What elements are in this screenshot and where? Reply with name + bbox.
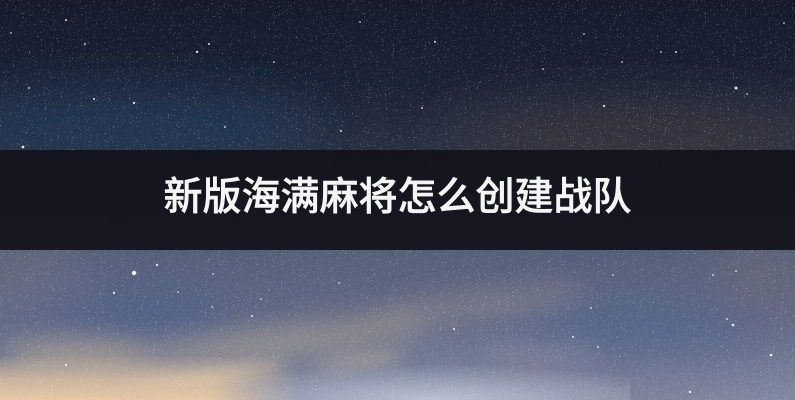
title: 新版海满麻将怎么创建战队: [163, 176, 632, 219]
sky tones: [0, 90, 795, 400]
warm horizon: [0, 355, 300, 400]
sunset clouds: [5, 283, 600, 379]
title band: [0, 150, 795, 250]
horizon glow: [200, 340, 630, 400]
